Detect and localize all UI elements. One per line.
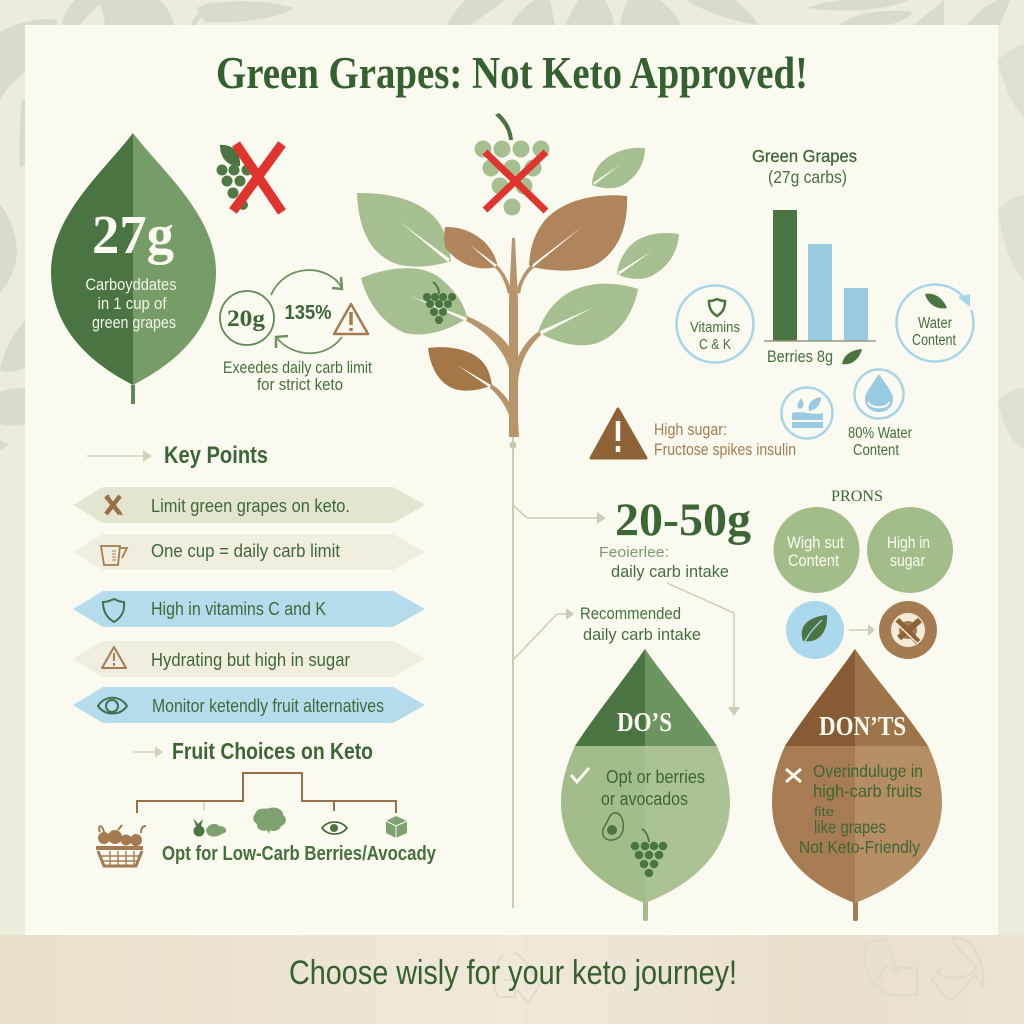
icon: leaf cluster bbox=[253, 807, 286, 834]
circle: wigh sut content: Wigh sut bbox=[787, 534, 844, 552]
circle: high in sugar bbox=[867, 507, 953, 593]
arrow: leaf to crossed bbox=[849, 624, 875, 636]
circle: high in sugar: High in bbox=[887, 534, 930, 552]
recycle watermark bbox=[494, 937, 983, 1003]
icon: crossed grape bunch bbox=[474, 113, 550, 216]
badge: water content bbox=[896, 284, 974, 362]
circle: high in sugar: sugar bbox=[890, 552, 925, 570]
icon: basket bbox=[96, 825, 146, 866]
icon: grapes on leaf bbox=[423, 282, 456, 324]
leaf stat: 27g: Carboyddates bbox=[86, 276, 176, 294]
badge: vitamins: C & K bbox=[699, 336, 731, 353]
cycle: 20g 135%: 20g bbox=[227, 306, 266, 331]
leaf: do's: or avocados bbox=[601, 789, 688, 809]
heading: key points bbox=[87, 442, 268, 469]
key point 3: High in vitamins C and K bbox=[151, 598, 327, 619]
arrow down to do's bbox=[667, 583, 740, 716]
footer tagline: Choose wisly for your keto journey! bbox=[289, 954, 737, 992]
warning: high sugar: High sugar: bbox=[654, 421, 727, 439]
warning: high sugar bbox=[591, 409, 796, 459]
heading: prons: PRONS bbox=[831, 488, 883, 505]
icon: water with leaves bbox=[782, 388, 832, 438]
icon: warning bbox=[334, 304, 368, 334]
caption: daily carb intake: Feoierlee: bbox=[599, 544, 669, 561]
badge: vitamins bbox=[676, 286, 754, 362]
icon: grapes bbox=[631, 829, 667, 877]
circle: wigh sut content bbox=[774, 507, 860, 593]
heading: fruit choices: Fruit Choices on Keto bbox=[172, 738, 373, 764]
caption: exceeds limit: for strict keto bbox=[257, 376, 343, 394]
leaf: don'ts: Not Keto-Friendly bbox=[799, 837, 920, 857]
heading: key points: Key Points bbox=[164, 442, 268, 469]
key point 5 bbox=[73, 687, 425, 723]
cycle: 20g 135% bbox=[220, 270, 368, 353]
caption: 80% water: 80% Water bbox=[848, 425, 912, 442]
icon: crossed grapes bbox=[216, 144, 282, 212]
cycle: 20g 135%: 135% bbox=[284, 302, 332, 324]
stat: 20-50g: 20-50g bbox=[615, 494, 752, 546]
label: opt for low-carb: Opt for Low-Carb Berries/Avocady bbox=[162, 842, 436, 865]
caption: recommended bbox=[580, 604, 701, 644]
leaf: do's: Opt or berries bbox=[606, 767, 705, 787]
key point 2: One cup = daily carb limit bbox=[151, 540, 340, 561]
icon: box bbox=[386, 816, 407, 838]
leaf stat: 27g: green grapes bbox=[92, 314, 176, 332]
caption: 80% water bbox=[848, 425, 912, 459]
leaf: don'ts bbox=[772, 649, 942, 921]
badge: water content: Content bbox=[912, 332, 957, 349]
icon: avocado bbox=[603, 813, 623, 840]
bar chart: Berries 8g bbox=[767, 347, 833, 366]
icon: small leaf bbox=[842, 349, 862, 364]
icon: water drop bbox=[854, 370, 904, 418]
leaf: do's: DO’S bbox=[617, 707, 672, 737]
leaf stat: 27g: in 1 cup of bbox=[98, 295, 167, 313]
caption: exceeds limit: Exeedes daily carb limit bbox=[223, 359, 372, 377]
key point 3 bbox=[73, 591, 425, 627]
key point 1 bbox=[73, 487, 425, 523]
caption: exceeds limit bbox=[223, 359, 372, 394]
caption: 80% water: Content bbox=[853, 442, 900, 459]
leaf: don'ts: like grapes bbox=[814, 817, 886, 837]
bar chart: Green Grapes bbox=[752, 146, 857, 166]
arrow to 20-50g bbox=[513, 505, 606, 524]
footer band bbox=[0, 935, 1024, 1024]
title: Green Grapes: Not Keto Approved! bbox=[216, 48, 808, 98]
bracket tree bbox=[137, 773, 396, 813]
key point 4: Hydrating but high in sugar bbox=[151, 649, 350, 670]
badge: vitamins: Vitamins bbox=[690, 319, 740, 336]
leaf stat: 27g: 27g bbox=[92, 204, 174, 265]
key point 4 bbox=[73, 641, 425, 677]
icon: eye bbox=[322, 822, 347, 834]
trunk and branches bbox=[466, 238, 541, 437]
key point 2 bbox=[73, 534, 425, 570]
warning: high sugar: Fructose spikes insulin bbox=[654, 441, 796, 459]
icon: crossed badge bbox=[879, 601, 937, 659]
bar chart bbox=[752, 146, 876, 366]
tree leaves bbox=[357, 193, 451, 267]
leaf: do's bbox=[561, 649, 730, 921]
icon: leaf badge bbox=[786, 601, 844, 659]
leaf: don'ts: Overinduluge in bbox=[813, 761, 923, 781]
leaf: don'ts: fite bbox=[814, 804, 834, 819]
caption: daily carb intake bbox=[599, 544, 729, 581]
caption: recommended: daily carb intake bbox=[583, 625, 701, 644]
arrow to recommended bbox=[513, 608, 574, 660]
key point 5: Monitor ketendly fruit alternatives bbox=[152, 696, 384, 716]
key point 1: Limit green grapes on keto. bbox=[151, 495, 350, 516]
leaf: don'ts: DON’TS bbox=[819, 711, 906, 741]
leaf: don'ts: high-carb fruits bbox=[813, 781, 922, 801]
leaf stat: 27g bbox=[51, 133, 216, 404]
background foliage bbox=[0, 0, 1024, 450]
caption: recommended: Recommended bbox=[580, 604, 681, 623]
caption: daily carb intake: daily carb intake bbox=[611, 562, 729, 581]
icon: berries bbox=[193, 818, 226, 837]
tree bbox=[357, 148, 679, 908]
bar chart: (27g carbs) bbox=[768, 167, 847, 187]
badge: water content: Water bbox=[918, 315, 952, 332]
circle: wigh sut content: Content bbox=[788, 552, 839, 570]
